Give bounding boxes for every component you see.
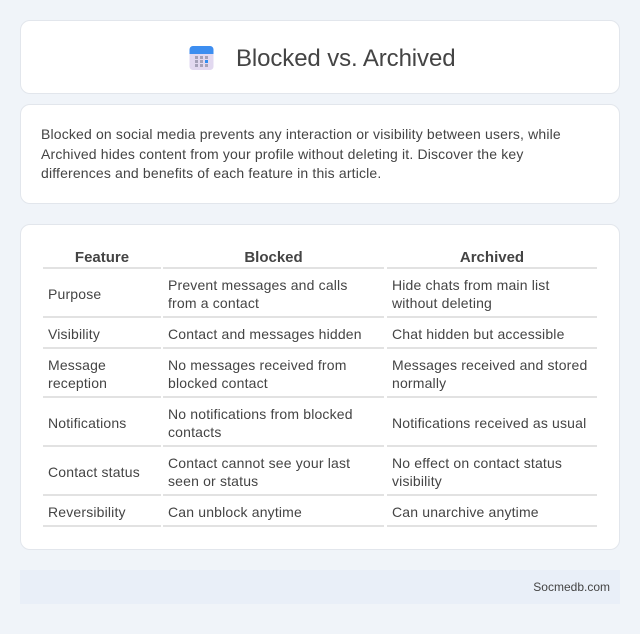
row: Message reception: Message xyxy=(48,357,106,373)
footer bar xyxy=(20,570,620,604)
intro text: Blocked on social media prevents any interaction or visibility between users, while xyxy=(41,126,561,142)
table: Contact cannot see your last xyxy=(168,455,350,471)
title card xyxy=(20,20,620,94)
header: Archived: Archived xyxy=(460,249,524,266)
intro text: differences and benefits of each feature in this article. xyxy=(41,165,381,181)
comparison table panel xyxy=(20,224,620,550)
row: Contact status: Contact status xyxy=(48,464,140,480)
table: blocked contact xyxy=(168,375,268,391)
header: Blocked: Blocked xyxy=(244,249,303,266)
table: Prevent messages and calls xyxy=(168,277,348,293)
table: without deleting xyxy=(392,295,492,311)
row: Notifications: Notifications xyxy=(48,415,126,431)
table: normally xyxy=(392,375,446,391)
table: Contact and messages hidden xyxy=(168,326,362,342)
row: Reversibility: Reversibility xyxy=(48,504,126,520)
row: Message reception: reception xyxy=(48,375,107,391)
table: Messages received and stored xyxy=(392,357,587,373)
header: Feature: Feature xyxy=(75,249,129,266)
table: from a contact xyxy=(168,295,259,311)
table: Chat hidden but accessible xyxy=(392,326,565,342)
table: Notifications received as usual xyxy=(392,415,586,431)
table: contacts xyxy=(168,424,222,440)
table: Hide chats from main list xyxy=(392,277,550,293)
title: Blocked vs. Archived xyxy=(236,45,455,72)
table: seen or status xyxy=(168,473,258,489)
intro text panel xyxy=(20,104,620,204)
intro text xyxy=(41,126,561,181)
table: No effect on contact status xyxy=(392,455,562,471)
table: No messages received from xyxy=(168,357,347,373)
table: No notifications from blocked xyxy=(168,406,353,422)
row: Purpose: Purpose xyxy=(48,286,101,302)
icon: calendar xyxy=(190,46,214,70)
footer text: Socmedb.com xyxy=(533,580,610,594)
row: Message reception xyxy=(48,357,107,391)
intro text: Archived hides content from your profile without deleting it. Discover the key xyxy=(41,146,523,162)
table: Can unarchive anytime xyxy=(392,504,539,520)
table: Can unblock anytime xyxy=(168,504,302,520)
row: Visibility: Visibility xyxy=(48,326,100,342)
table: visibility xyxy=(392,473,442,489)
